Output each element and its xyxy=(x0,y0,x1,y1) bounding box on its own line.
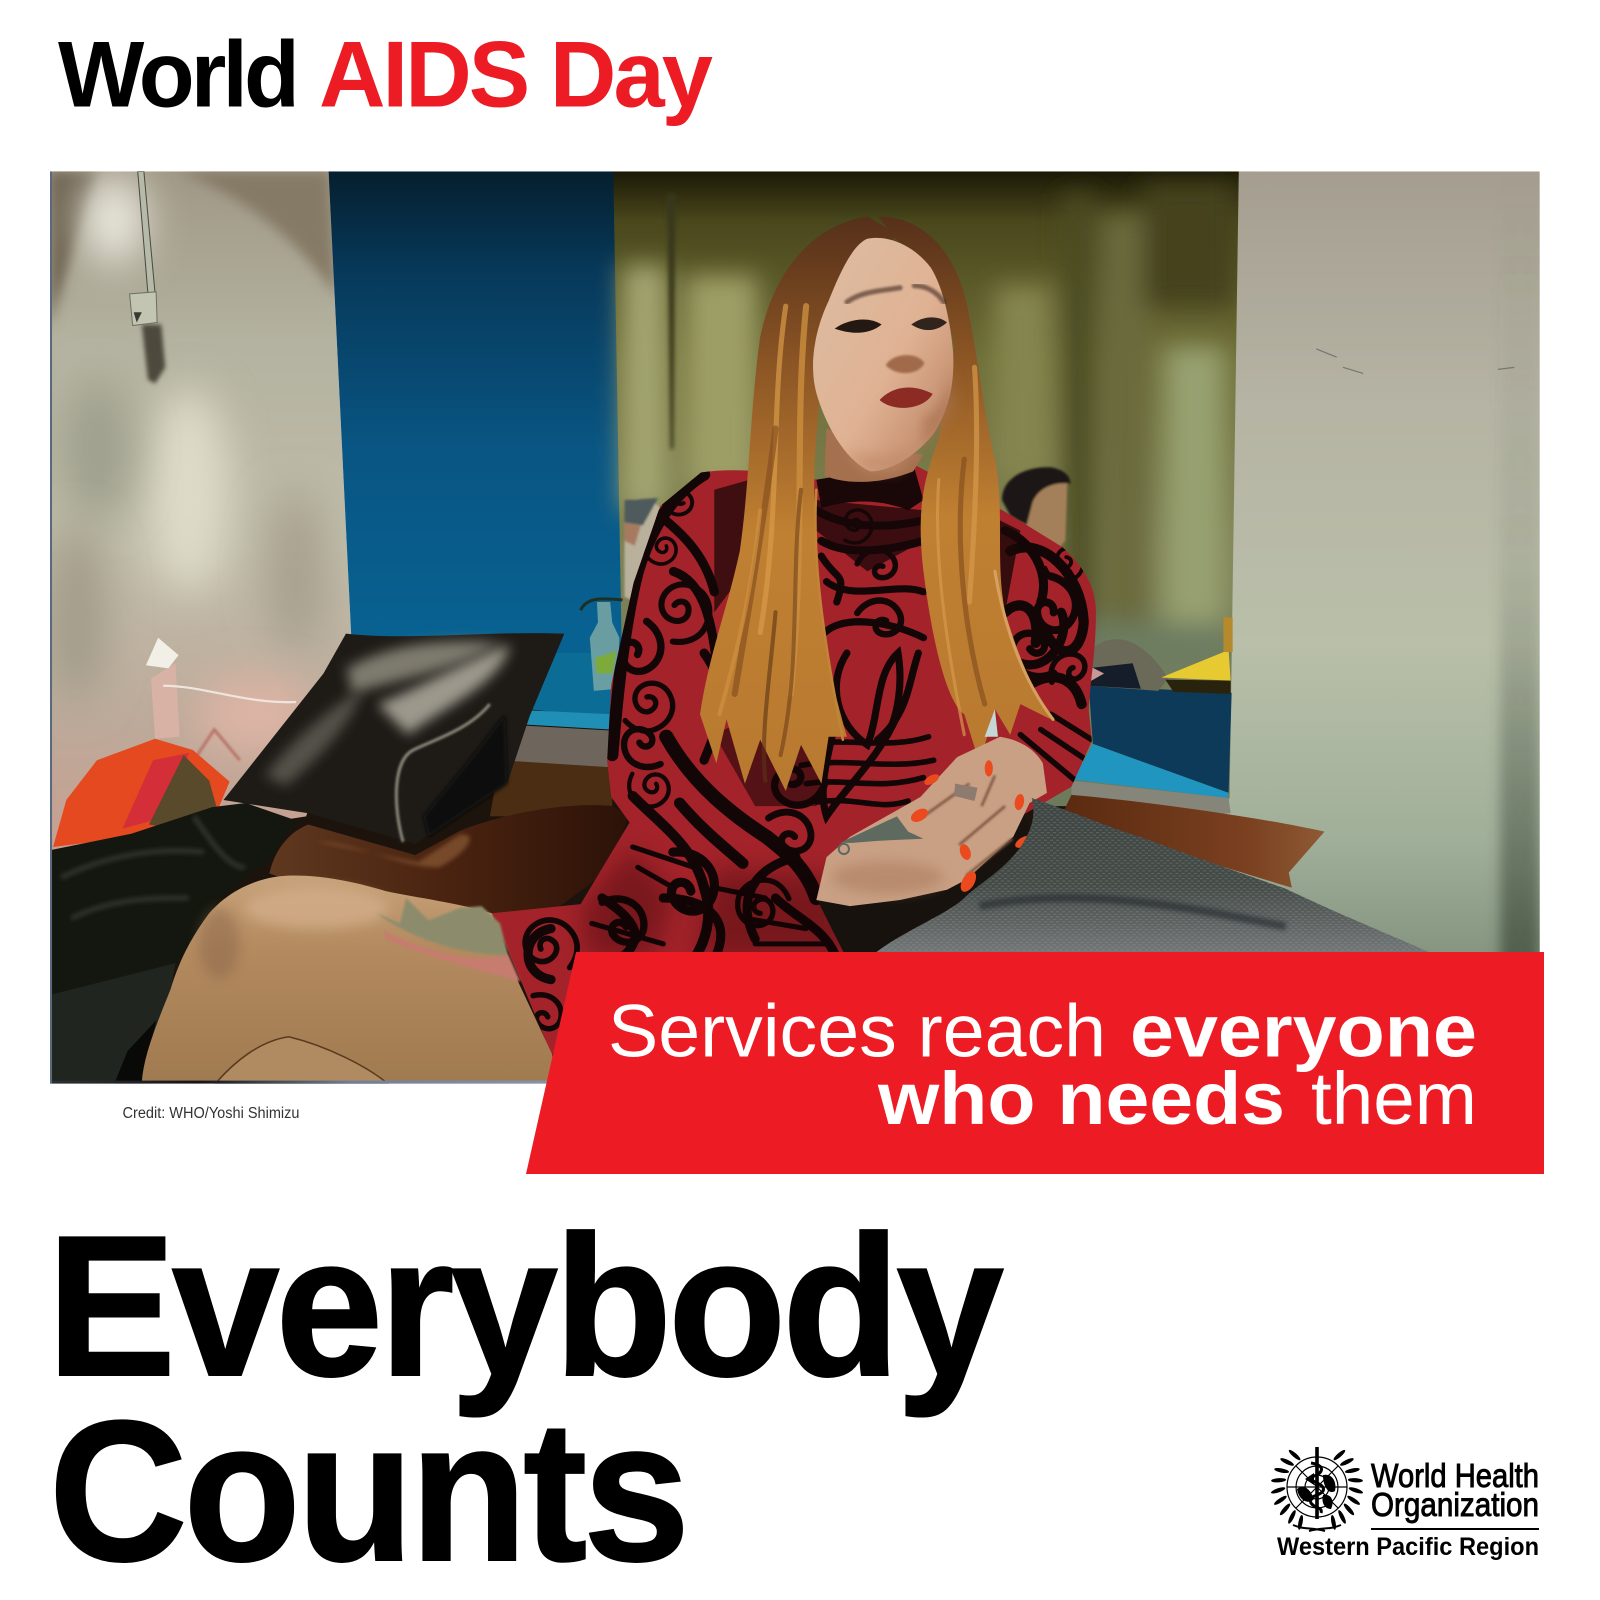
left brown cushion xyxy=(269,805,628,923)
objects behind woman on left xyxy=(624,498,663,602)
hand with tattoo and orange nails xyxy=(816,737,1047,906)
cheek and jaw shading xyxy=(852,384,956,480)
banner text: everyone xyxy=(1130,990,1477,1072)
title: World AIDS Day xyxy=(58,22,713,126)
right wall xyxy=(1216,172,1540,952)
banner text: them xyxy=(1311,1057,1477,1140)
heading: Everybody Counts xyxy=(47,1195,1004,1600)
nails xyxy=(909,760,1034,894)
face xyxy=(813,238,955,471)
photo credit: Credit: WHO/Yoshi Shimizu xyxy=(122,1105,300,1122)
hair strands xyxy=(719,306,1053,781)
WHO wordmark: Organization xyxy=(1371,1486,1539,1523)
glass bottle with plant xyxy=(581,599,622,691)
man in background xyxy=(1002,467,1070,556)
lips xyxy=(880,387,933,408)
lower leg crease xyxy=(215,1037,388,1084)
black leather pillow xyxy=(223,633,564,844)
gap under right arm xyxy=(985,709,998,737)
red banner xyxy=(526,952,1544,1174)
nose xyxy=(886,355,924,373)
WHO wordmark: Western Pacific Region xyxy=(1277,1533,1539,1561)
banner text: who needs xyxy=(877,1057,1285,1140)
icon: WHO emblem xyxy=(1270,1447,1364,1531)
wall socket and white cable xyxy=(146,638,296,739)
photo: woman seated in a room xyxy=(46,171,1540,1084)
eyes xyxy=(835,317,947,333)
grey blanket xyxy=(872,798,1436,955)
heading: Everybody Counts: Counts xyxy=(49,1380,686,1600)
heading: Everybody Counts: Everybody xyxy=(47,1195,1004,1418)
dark seat xyxy=(50,963,176,1084)
banner text: Services reach xyxy=(608,990,1106,1072)
wall conduit and switch xyxy=(130,171,165,384)
left wall xyxy=(46,171,353,857)
title: World AIDS Day: AIDS Day xyxy=(319,22,713,126)
thigh tattoo xyxy=(377,898,520,982)
back room with curtains xyxy=(613,171,1241,806)
WHO wordmark xyxy=(1277,1457,1539,1561)
bare leg xyxy=(142,876,556,1084)
left window sill xyxy=(490,653,627,816)
dress swirl pattern xyxy=(518,464,1092,1033)
neck xyxy=(824,429,923,482)
shadow under hand xyxy=(818,900,860,952)
sleeve and torso black bands xyxy=(528,474,1092,980)
title: World AIDS Day: World xyxy=(58,22,296,126)
eyebrows xyxy=(847,286,944,302)
right window sill xyxy=(1071,686,1232,816)
banner text xyxy=(608,990,1477,1140)
photo dark base xyxy=(50,710,1066,1084)
hair xyxy=(700,216,1053,791)
photo edge lines xyxy=(50,171,550,1084)
dress xyxy=(492,464,1096,1056)
orange jacket xyxy=(53,739,230,847)
WHO logo xyxy=(1270,1447,1539,1561)
clothes pile and yellow table xyxy=(1087,617,1233,694)
blue wall xyxy=(329,171,627,673)
right brown cushion xyxy=(1061,795,1324,888)
WHO wordmark: World Health xyxy=(1371,1457,1539,1494)
black jacket xyxy=(52,803,294,964)
